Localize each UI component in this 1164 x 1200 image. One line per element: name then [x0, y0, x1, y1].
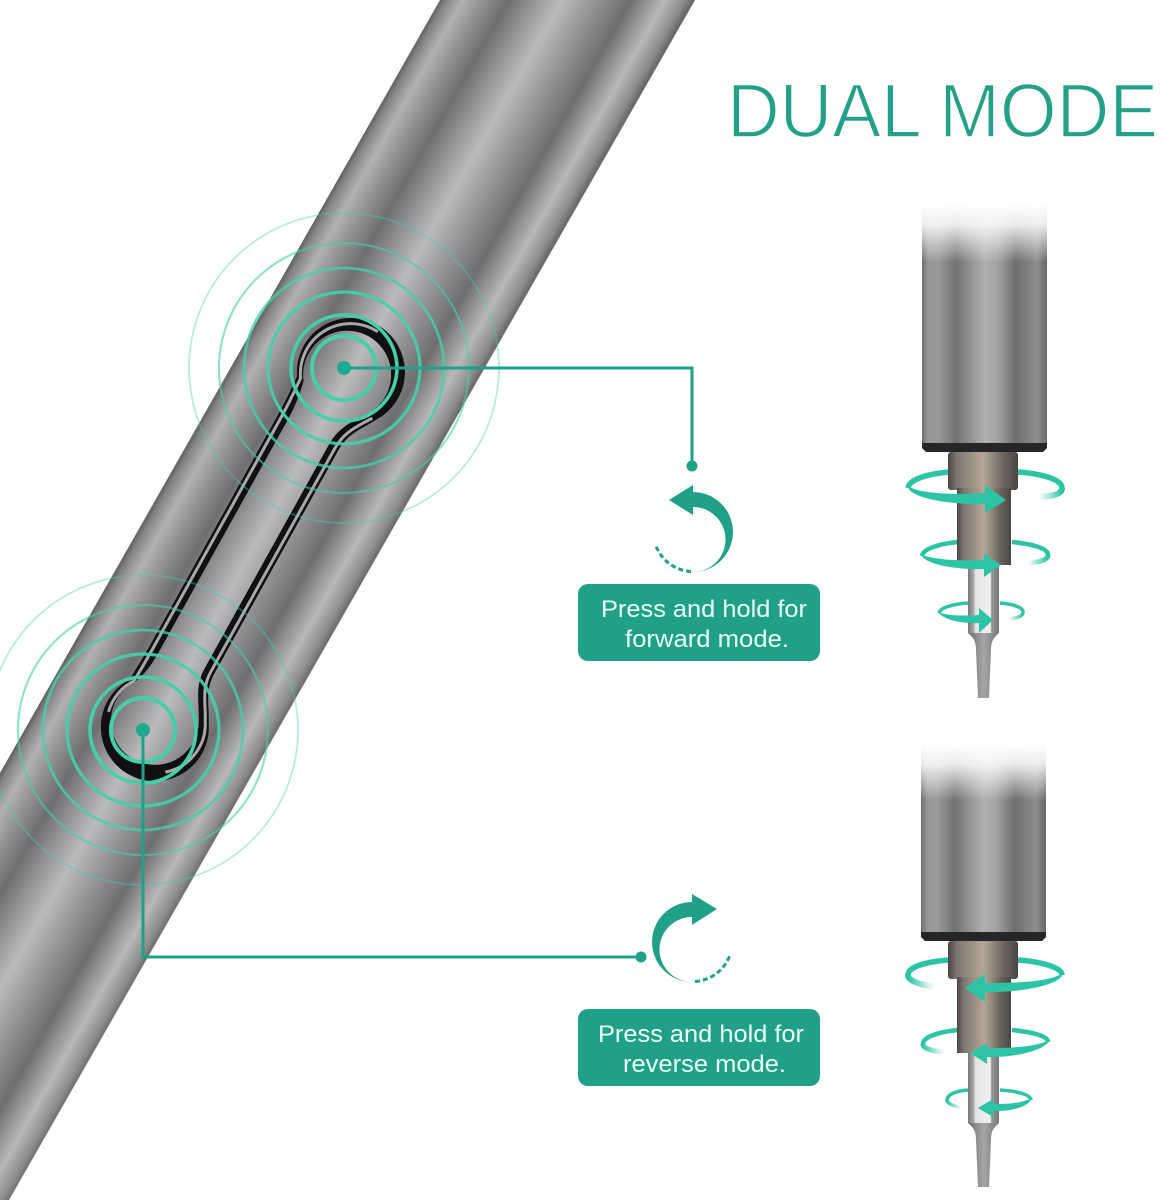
button slot [81, 299, 425, 801]
callout: forward mode: forward mode. [625, 626, 789, 653]
rotation rings behind tool [908, 472, 1062, 619]
reverse shaft [957, 977, 1011, 1053]
icon: reverse rotation arrow [652, 894, 730, 982]
reverse rotation arrows front [965, 973, 1063, 1117]
forward mode screwdriver [908, 205, 1062, 698]
reverse bit tip [968, 1123, 999, 1187]
title: DUAL MODE [727, 69, 1158, 154]
reverse collar [948, 941, 1018, 979]
callout: reverse mode [578, 1009, 820, 1086]
pulse rings: upper button [189, 213, 499, 523]
callout: reverse mode: Press and hold for [598, 1021, 804, 1048]
reverse rotation rings behind tool [908, 960, 1062, 1107]
rotation arrows front [908, 485, 1006, 633]
bit tip [968, 633, 999, 698]
hex bit [968, 565, 999, 633]
leader line: reverse button to arrow [136, 723, 646, 962]
collar [948, 452, 1018, 490]
reverse mode screwdriver [908, 745, 1063, 1187]
shaft [957, 488, 1011, 565]
icon: forward rotation arrow [656, 485, 733, 572]
callout: forward mode: Press and hold for [601, 596, 807, 623]
leader line: forward button to arrow [337, 361, 698, 472]
tool body [922, 205, 1047, 446]
large screwdriver body [0, 0, 695, 1200]
reverse tool body [921, 745, 1046, 935]
reverse hex bit [968, 1053, 999, 1123]
callout: reverse mode: reverse mode. [623, 1051, 786, 1078]
callout: forward mode [578, 584, 820, 661]
pulse rings: lower button [0, 575, 298, 885]
